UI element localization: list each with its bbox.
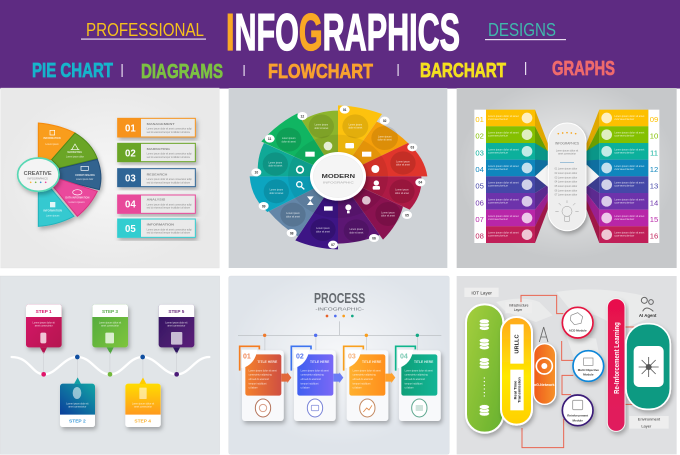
panel: modern wheel infographic: Lorem ipsum [315, 124, 328, 127]
panel: pie chart infographic: INFORMATION [43, 137, 61, 140]
reinforcement module circle: Module [572, 418, 583, 422]
card 04: ut labore [405, 387, 414, 390]
panel: modern wheel infographic: Lorem ipsum [270, 189, 283, 192]
left column rows 01-08: consectetur [488, 168, 508, 171]
multi objective module circle [573, 351, 604, 381]
card 01: ut labore [249, 387, 258, 390]
center capsule: 05 Lorem ipsum dolor [555, 185, 577, 188]
card 01: tempor incididunt [249, 382, 267, 385]
semicircle chart [38, 123, 101, 226]
center capsule: 07 Lorem ipsum dolor [555, 194, 577, 197]
panel: pie chart infographic: CURRENT RESEARCH [75, 174, 95, 177]
header banner [0, 0, 680, 88]
list item 02: MARKETING [147, 148, 170, 151]
left column rows 01-08: Lorem ipsum dolor sit amet [488, 148, 519, 151]
card 04 [396, 334, 441, 421]
left column rows 01-08: consectetur [488, 185, 508, 188]
multi objective module circle: Multi Objective [578, 368, 599, 372]
teal environment capsule [626, 324, 670, 409]
panel: modern wheel infographic: Lorem ipsum [282, 137, 295, 140]
panel: step timeline infographic [0, 276, 220, 454]
panel: modern wheel infographic: dolor sit amet [286, 215, 300, 218]
wheel segments [250, 105, 427, 249]
number badges [251, 106, 425, 249]
left column rows 01-08: Lorem ipsum dolor sit amet [488, 182, 519, 185]
left column rows 01-08: 02 [475, 132, 484, 141]
panel: modern wheel infographic: dolor sit amet [381, 215, 395, 218]
number badges: 07 [331, 243, 335, 247]
left column rows 01-08: Lorem ipsum dolor sit amet [488, 165, 519, 168]
icon: lightbulb [555, 200, 579, 221]
category: flowchart: FLOWCHART [268, 61, 373, 83]
left column rows 01-08 [474, 110, 535, 243]
card 01 [240, 334, 291, 421]
list item 02: 02 [125, 148, 136, 159]
card 03: tempor incididunt [353, 382, 371, 385]
right column rows 09-16: 16 [650, 232, 658, 241]
process heading: PROCESS [314, 291, 365, 307]
card 02: TITLE HERE [310, 360, 330, 364]
right column rows 09-16: 14 [650, 198, 659, 207]
center capsule: 03 Lorem ipsum dolor [555, 176, 577, 179]
subtitle: professional: PROFESSIONAL [86, 20, 204, 40]
left column rows 01-08: Lorem ipsum dolor sit amet [488, 198, 519, 201]
step 4 card: Lorem ipsum dolor sit [132, 403, 154, 406]
card 03 [344, 334, 395, 421]
card 01: TITLE HERE [257, 360, 278, 364]
number badges: 06 [372, 236, 376, 240]
left column rows 01-08: consectetur [488, 118, 508, 121]
IoT layer label: IOT Layer [471, 290, 492, 295]
panel: modern wheel infographic: dolor sit amet [316, 230, 330, 233]
card 04: Lorem ipsum dolor sit amet [405, 369, 433, 372]
card 02: tempor incididunt [301, 382, 319, 385]
step 2 card: Lorem ipsum dolor sit [66, 403, 89, 406]
yellow URLLC capsule: Real Time [512, 380, 517, 399]
orange network capsule: xG-Network [534, 383, 556, 387]
list item 03: Lorem ipsum dolor sit amet consectetur adipi [147, 178, 192, 181]
world map backdrop [496, 289, 656, 382]
category: barchart: BARCHART [420, 60, 506, 82]
panel: modern wheel infographic [229, 88, 447, 268]
step 3 card [92, 304, 128, 377]
step 1 card: Lorem ipsum dolor sit [33, 322, 55, 325]
number badges: 05 [405, 213, 409, 217]
panel: modern wheel infographic: dolor sit amet [269, 192, 284, 195]
center capsule [548, 123, 586, 231]
left column rows 01-08: Lorem ipsum dolor sit amet [488, 132, 519, 135]
list item 04: sed do eiusmod tempor incididunt ut labore [147, 207, 191, 210]
category: pie chart: PIE CHART [32, 60, 113, 82]
right column rows 09-16: consectetur [614, 168, 635, 171]
step 5 card: Lorem ipsum dolor sit [165, 322, 188, 325]
left column rows 01-08: 08 [475, 232, 484, 241]
center capsule: Lorem ipsum dolor sit [556, 149, 578, 152]
right column rows 09-16: consectetur [614, 185, 635, 188]
segment icons [297, 142, 380, 213]
list item 05 [118, 219, 195, 237]
panel: pie chart infographic: Lorem ipsum [45, 143, 59, 146]
panel: IoT reinforcement learning diagram [457, 276, 677, 454]
left column rows 01-08: consectetur [488, 151, 508, 154]
panel: pie chart infographic: Lorem ipsum [69, 201, 85, 204]
card 02: ut labore [301, 387, 310, 390]
AI agent label: AI Agent [639, 313, 657, 318]
left column rows 01-08: Lorem ipsum dolor sit amet [488, 115, 519, 118]
folded ribbons [535, 110, 599, 243]
list item 05: sed do eiusmod tempor incididunt ut labore [147, 232, 191, 235]
panel: modern wheel infographic: Lorem ipsum [350, 228, 363, 231]
center badge: INFOGRAPHICS [28, 176, 48, 180]
list item 02: Lorem ipsum dolor sit amet consectetur adipi [147, 153, 192, 156]
environment layer label: Layer [641, 423, 652, 428]
panel: modern wheel infographic: Lorem ipsum [378, 135, 391, 138]
right column rows 09-16: consectetur [614, 135, 635, 138]
number badges: 08 [290, 231, 294, 235]
center capsule: 01 Lorem ipsum dolor [555, 168, 577, 171]
panel: pie chart infographic: Lorem ipsum dolor [66, 156, 84, 159]
right column rows 09-16: Lorem ipsum dolor sit amet [614, 148, 645, 151]
left column rows 01-08: Lorem ipsum dolor sit amet [488, 232, 519, 235]
right column rows 09-16: Lorem ipsum dolor sit amet [614, 215, 645, 218]
list item 04: ANALYSIS [147, 199, 166, 202]
green IoT capsule [466, 304, 503, 433]
right column rows 09-16: Lorem ipsum dolor sit amet [614, 198, 645, 201]
center capsule: INFOGRAPHICS [555, 142, 580, 146]
panel: pie chart infographic: DATA INFORMATION [65, 197, 90, 200]
right column rows 09-16: 11 [650, 148, 658, 157]
right column rows 09-16: 09 [650, 115, 658, 124]
left column rows 01-08: 01 [475, 115, 484, 124]
orange network capsule [534, 344, 556, 404]
card 04: elit sed do eiusmod [405, 378, 425, 381]
center hub: INFOGRAPHIC [323, 181, 355, 185]
number badges: 11 [268, 137, 272, 141]
step 1 card [26, 304, 62, 377]
yellow URLLC capsule: URLLC [515, 334, 521, 354]
panel: modern wheel infographic: dolor sit amet [395, 192, 409, 195]
left column rows 01-08: 06 [475, 198, 484, 207]
panel: process infographic [229, 276, 449, 454]
yellow URLLC capsule [501, 317, 532, 425]
right column rows 09-16: consectetur [614, 151, 635, 154]
list item 05: INFORMATION [147, 224, 175, 227]
card 03: elit sed do eiusmod [353, 378, 373, 381]
step 5 card: STEP 5 [168, 309, 185, 314]
category: graphs: GRAPHS [552, 58, 615, 80]
left column rows 01-08: 05 [475, 182, 484, 191]
step 2 card [60, 355, 95, 427]
list item 04: Lorem ipsum dolor sit amet consectetur adipi [147, 203, 192, 206]
list item 04: 04 [125, 199, 136, 210]
panel: modern wheel infographic: Lorem ipsum [316, 227, 330, 230]
ACO module circle [562, 307, 593, 338]
card 03: Lorem ipsum dolor sit amet [353, 369, 381, 372]
card 02 [291, 334, 343, 421]
process heading: -INFOGRAPHIC- [315, 306, 364, 312]
panel: pie chart infographic [1, 88, 219, 268]
right column rows 09-16: consectetur [614, 118, 635, 121]
card 03: ut labore [353, 387, 362, 390]
step 4 card [125, 355, 161, 427]
list item 01: MANAGEMENT [147, 123, 176, 126]
right column rows 09-16: 10 [650, 132, 658, 141]
center badge: CREATIVE [24, 171, 52, 177]
category: diagrams: DIAGRAMS [141, 61, 223, 83]
step 1 card: STEP 1 [36, 309, 52, 314]
panel: pie chart infographic: Lorem ipsum [46, 214, 59, 217]
reinforcement module circle: Reinforcement [567, 414, 588, 418]
step 4 card: STEP 4 [134, 418, 151, 423]
number badges: 09 [262, 204, 266, 208]
left column rows 01-08: consectetur [488, 135, 508, 138]
card 02: Lorem ipsum dolor sit amet [301, 369, 329, 372]
infrastructure layer label: Infrastructure [509, 303, 529, 307]
panel: modern wheel infographic: Lorem ipsum [396, 160, 410, 163]
left column rows 01-08: consectetur [488, 235, 508, 238]
card 01: consectetur adipiscing [249, 374, 272, 377]
card 03: TITLE HERE [362, 360, 382, 364]
card 01: 01 [243, 353, 251, 360]
center hub [310, 152, 366, 201]
right column rows 09-16: 15 [650, 215, 658, 224]
left column rows 01-08: consectetur [488, 218, 508, 221]
center capsule: 04 Lorem ipsum dolor [555, 181, 577, 184]
panel: modern wheel infographic: dolor sit amet [268, 165, 283, 168]
step 3 card: Lorem ipsum dolor sit [99, 322, 121, 325]
step 5 card [159, 304, 194, 377]
center capsule: 02 Lorem ipsum dolor [555, 172, 577, 175]
center capsule: 06 Lorem ipsum dolor [555, 189, 577, 192]
list item 03: RESEARCH [147, 173, 168, 176]
right column rows 09-16: Lorem ipsum dolor sit amet [614, 232, 645, 235]
left column rows 01-08: consectetur [488, 201, 508, 204]
list item 01: sed do eiusmod tempor incididunt ut labore [147, 131, 191, 134]
icon: AI agent [641, 297, 653, 311]
right column rows 09-16: 13 [650, 182, 658, 191]
right column rows 09-16 [599, 110, 659, 243]
card 03: 03 [348, 353, 356, 360]
subtitle: designs: DESIGNS [488, 20, 556, 40]
environment layer label: Environment [638, 417, 661, 422]
number badges: 03 [410, 146, 414, 150]
list item 03: sed do eiusmod tempor incididunt ut labore [147, 181, 191, 184]
left column rows 01-08: 03 [475, 148, 484, 157]
panel: modern wheel infographic: dolor sit amet [396, 164, 410, 167]
card 01: elit sed do eiusmod [249, 378, 269, 381]
left column rows 01-08: 04 [475, 165, 485, 174]
card 01: Lorem ipsum dolor sit amet [249, 369, 277, 372]
wave line [12, 357, 209, 374]
IoT layer label [464, 288, 499, 297]
list item 05: 05 [125, 224, 136, 235]
list item 01: 01 [125, 123, 136, 134]
number badges: 02 [383, 119, 387, 123]
panel: modern wheel infographic: Lorem ipsum [349, 123, 362, 126]
list item 05: Lorem ipsum dolor sit amet consectetur adipi [147, 228, 192, 231]
right column rows 09-16: Lorem ipsum dolor sit amet [614, 132, 645, 135]
card 04: tempor incididunt [405, 382, 423, 385]
step 2 card: amet consectetur [68, 406, 86, 409]
number badges: 10 [254, 171, 258, 175]
multi objective module circle: Module [583, 373, 594, 377]
card 04: TITLE HERE [414, 360, 434, 364]
red reinforcement learning capsule [607, 299, 625, 431]
step 3 card: STEP 3 [102, 309, 119, 314]
reinforcement module circle [562, 395, 593, 426]
panel: modern wheel infographic: Lorem ipsum [381, 211, 395, 214]
panel: modern wheel infographic: dolor sit amet [282, 140, 296, 143]
step 2 card: STEP 2 [69, 418, 86, 423]
panel: modern wheel infographic: Lorem ipsum [286, 212, 300, 215]
list item 01: Lorem ipsum dolor sit amet consectetur adipi [147, 128, 192, 131]
panel: pie chart infographic: INFORMATION [43, 209, 62, 212]
list item 02 [118, 143, 195, 162]
step 3 card: amet consectetur [101, 325, 119, 328]
panel: modern wheel infographic: dolor sit amet [378, 139, 392, 142]
list item 03 [118, 169, 195, 187]
panel: pie chart infographic: MARKETING [67, 151, 82, 154]
yellow URLLC capsule: Transmission [517, 377, 522, 403]
process heading [314, 291, 365, 317]
panel: modern wheel infographic: dolor sit amet [349, 231, 364, 234]
right column rows 09-16: consectetur [614, 201, 635, 204]
list item 03: 03 [125, 173, 136, 184]
card 04: consectetur adipiscing [405, 374, 428, 377]
list item 04 [118, 195, 195, 213]
panel: pie chart infographic: Lorem ipsum dolor [76, 178, 94, 181]
right column rows 09-16: Lorem ipsum dolor sit amet [614, 182, 645, 185]
number badges: 04 [418, 181, 422, 185]
list item 02: sed do eiusmod tempor incididunt ut labore [147, 156, 191, 159]
left column rows 01-08: Lorem ipsum dolor sit amet [488, 215, 519, 218]
list item 01 [118, 118, 195, 137]
card 02: 02 [296, 353, 304, 360]
panel: modern wheel infographic: dolor sit amet [314, 127, 329, 130]
step 1 card: amet consectetur [35, 325, 53, 328]
right column rows 09-16: consectetur [614, 235, 635, 238]
environment layer label [629, 416, 669, 429]
step 4 card: amet consectetur [134, 406, 152, 409]
infrastructure layer label: Layer [514, 308, 523, 312]
card 04: 04 [400, 353, 408, 360]
center capsule: amet consectetur [558, 153, 576, 156]
panel: sixteen-step ribbon infographic [457, 88, 677, 268]
left column rows 01-08: 07 [475, 215, 484, 224]
card 02: consectetur adipiscing [301, 374, 324, 377]
center hub: MODERN [322, 174, 355, 180]
title: infographics: INFOGRAPHICS [226, 4, 460, 62]
number badges: 01 [343, 108, 347, 112]
icon: tower [539, 327, 548, 342]
infrastructure layer label [505, 302, 532, 313]
panel: modern wheel infographic: dolor sit amet [348, 127, 363, 130]
connector arrows [521, 295, 642, 448]
right column rows 09-16: consectetur [614, 218, 635, 221]
panel: modern wheel infographic: Lorem ipsum [395, 189, 409, 192]
ACO module circle: ACO Module [569, 328, 587, 332]
right column rows 09-16: 12 [650, 165, 658, 174]
number badges: 12 [300, 114, 304, 118]
center badge [18, 158, 59, 191]
card 03: consectetur adipiscing [353, 374, 376, 377]
right column rows 09-16: Lorem ipsum dolor sit amet [614, 115, 645, 118]
red reinforcement learning capsule: Re-Inforcement Learning [614, 322, 621, 394]
panel: modern wheel infographic: Lorem ipsum [269, 161, 282, 164]
card 02: elit sed do eiusmod [301, 378, 321, 381]
step 5 card: amet consectetur [167, 325, 185, 328]
right column rows 09-16: Lorem ipsum dolor sit amet [614, 165, 645, 168]
